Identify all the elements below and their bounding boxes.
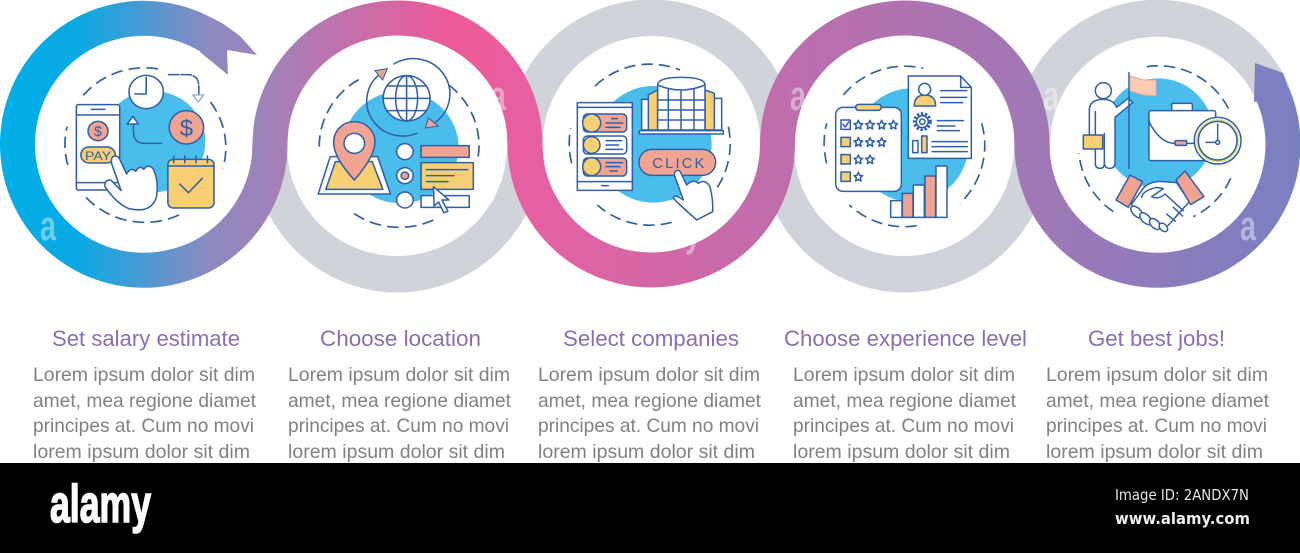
icon: best jobs <box>1079 66 1241 233</box>
icon: briefcase <box>1149 103 1216 161</box>
step 2 text <box>288 326 512 463</box>
icon: tablet list <box>577 103 632 190</box>
grey ribbon segments <box>270 18 1273 274</box>
icon: pointing hand <box>105 156 157 210</box>
option radio buttons <box>397 144 413 208</box>
stock photo footer bar <box>0 463 1300 553</box>
icon: handshake <box>1116 171 1204 233</box>
step 2 text: Lorem ipsum dolor sit dim <box>288 364 510 386</box>
step 4 text: Choose experience level <box>784 326 1027 351</box>
icon: small coin <box>88 121 108 141</box>
icon: large coin <box>169 111 204 144</box>
step 1 text <box>33 326 257 463</box>
rating stars <box>854 120 898 181</box>
step 1 text: Lorem ipsum dolor sit dim <box>33 364 255 386</box>
icon: phone <box>76 105 120 190</box>
dashed arrow <box>169 75 204 102</box>
step 2 text: amet, mea regione diamet <box>288 390 512 412</box>
step 5 text: Lorem ipsum dolor sit dim <box>1046 364 1268 386</box>
white step discs <box>36 36 1266 256</box>
step 4 text: Lorem ipsum dolor sit dim <box>793 364 1015 386</box>
watermark letters: a <box>1240 202 1256 249</box>
coloured serpentine ribbon with arrow ends <box>18 17 1291 270</box>
watermark letters <box>40 72 1256 255</box>
website: www.alamy.com <box>1115 509 1250 528</box>
step 3 text: lorem ipsum dolor sit dim <box>538 441 755 463</box>
icon: select companies <box>569 64 730 225</box>
step 2 text: lorem ipsum dolor sit dim <box>288 441 505 463</box>
step 3 text: Select companies <box>563 326 739 351</box>
icon: cursor <box>433 187 449 213</box>
icon: salary estimate <box>65 68 226 222</box>
pay button: PAY <box>85 149 112 163</box>
step 4 text: amet, mea regione diamet <box>793 390 1017 412</box>
icon: map pin <box>334 122 375 180</box>
arrow head: start <box>200 17 257 75</box>
icon: person with flag <box>1083 73 1156 168</box>
step 4 text: lorem ipsum dolor sit dim <box>793 441 1010 463</box>
icon: bar chart <box>891 166 947 217</box>
step 5 text: principes at. Cum no movi <box>1046 415 1267 437</box>
watermark letters: a <box>40 202 56 249</box>
step 5 text <box>1046 326 1270 463</box>
watermark letters: a <box>490 72 506 119</box>
image id: Image ID: 2ANDX7N <box>1115 486 1249 504</box>
step 3 text <box>538 326 762 463</box>
step 3 text: Lorem ipsum dolor sit dim <box>538 364 760 386</box>
step 3 text: principes at. Cum no movi <box>538 415 759 437</box>
step 5 text: lorem ipsum dolor sit dim <box>1046 441 1263 463</box>
icon: small coin: $ <box>94 124 102 140</box>
step 1 text: lorem ipsum dolor sit dim <box>33 441 250 463</box>
step 4 text: principes at. Cum no movi <box>793 415 1014 437</box>
click button <box>639 149 716 175</box>
click button: CLICK <box>652 156 705 172</box>
watermark letters: a <box>1043 72 1059 119</box>
icon: office building <box>639 77 723 134</box>
step 2 text: Choose location <box>320 326 481 351</box>
icon: clock <box>1194 117 1241 164</box>
arrow head: end <box>1254 63 1291 102</box>
step 5 text: amet, mea regione diamet <box>1046 390 1270 412</box>
icon: rating clipboard <box>836 104 901 191</box>
return arrow <box>127 116 162 143</box>
step 5 text: Get best jobs! <box>1088 326 1225 351</box>
icon: large coin: $ <box>180 116 193 142</box>
step 1 text: Set salary estimate <box>52 326 240 351</box>
icon: choose location <box>318 59 479 227</box>
step 3 text: amet, mea regione diamet <box>538 390 762 412</box>
pay button <box>81 147 115 163</box>
icon: pointing hand <box>673 170 713 220</box>
watermark letters: y <box>685 208 701 255</box>
option cards <box>421 146 473 207</box>
icon: globe with arrows <box>367 59 450 136</box>
step 1 text: principes at. Cum no movi <box>33 415 254 437</box>
step 2 text: principes at. Cum no movi <box>288 415 509 437</box>
icon: calendar <box>168 156 214 208</box>
watermark letters: a <box>790 72 806 119</box>
step 4 text <box>784 326 1027 463</box>
icon: clock <box>129 75 163 109</box>
icon: experience level <box>824 66 985 227</box>
step 1 text: amet, mea regione diamet <box>33 390 257 412</box>
alamy logo: alamy <box>50 475 151 534</box>
icon: resume document <box>908 76 971 158</box>
icon: map <box>318 157 390 194</box>
